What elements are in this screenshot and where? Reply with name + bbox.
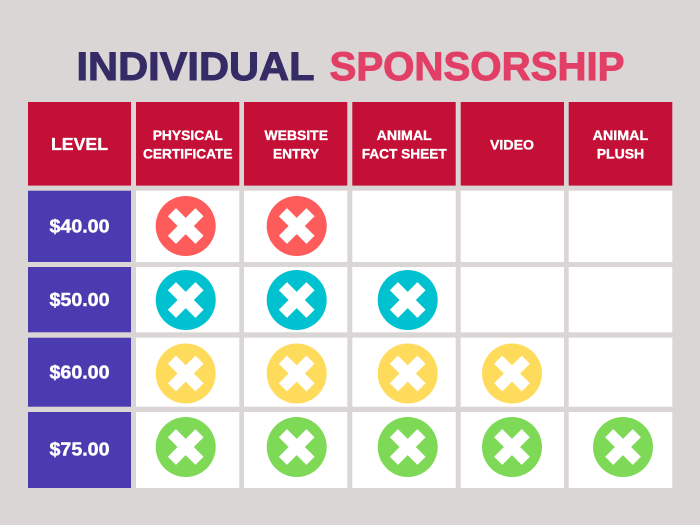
level: $40.00 bbox=[28, 191, 131, 262]
level: $50.00 bbox=[28, 267, 131, 332]
header: animal fact sheet bbox=[352, 102, 456, 186]
header: website entry: WEBSITE bbox=[264, 127, 328, 143]
header: video bbox=[461, 102, 564, 186]
header: animal fact sheet: ANIMAL bbox=[377, 127, 432, 143]
level: $60.00: $60.00 bbox=[50, 362, 110, 383]
header: video: VIDEO bbox=[490, 136, 534, 152]
cells bbox=[136, 412, 672, 488]
title: INDIVIDUAL bbox=[76, 45, 314, 89]
header: website entry bbox=[244, 102, 347, 186]
icons: yellow x marks bbox=[156, 344, 542, 404]
title: SPONSORSHIP bbox=[330, 45, 624, 89]
title bbox=[76, 45, 624, 89]
header: physical certificate bbox=[136, 102, 239, 186]
level: $40.00: $40.00 bbox=[50, 216, 110, 237]
icons: green x marks bbox=[156, 417, 653, 477]
panel: $75 row bbox=[28, 412, 672, 488]
cells bbox=[136, 338, 672, 407]
level: $60.00 bbox=[28, 338, 131, 407]
empty and filled cells bbox=[136, 191, 672, 262]
level: $50.00: $50.00 bbox=[50, 289, 110, 310]
header: animal plush: PLUSH bbox=[597, 145, 644, 161]
level: $75.00 bbox=[28, 412, 131, 488]
panel: $50 row bbox=[28, 267, 672, 332]
header: animal fact sheet: FACT SHEET bbox=[362, 145, 447, 161]
cells bbox=[136, 267, 672, 332]
panel: $60 row bbox=[28, 338, 672, 407]
header: animal plush bbox=[569, 102, 672, 186]
level: $75.00: $75.00 bbox=[50, 439, 110, 460]
header: physical certificate: CERTIFICATE bbox=[143, 145, 232, 161]
header: level: LEVEL bbox=[51, 134, 108, 154]
panel: header row bbox=[28, 102, 672, 186]
header: website entry: ENTRY bbox=[273, 145, 320, 161]
panel: $40 row bbox=[28, 191, 672, 262]
icons: red x marks bbox=[156, 196, 327, 256]
header: level bbox=[28, 102, 131, 186]
icons: teal x marks bbox=[156, 270, 438, 330]
header: physical certificate: PHYSICAL bbox=[153, 127, 223, 143]
header: animal plush: ANIMAL bbox=[593, 127, 649, 143]
